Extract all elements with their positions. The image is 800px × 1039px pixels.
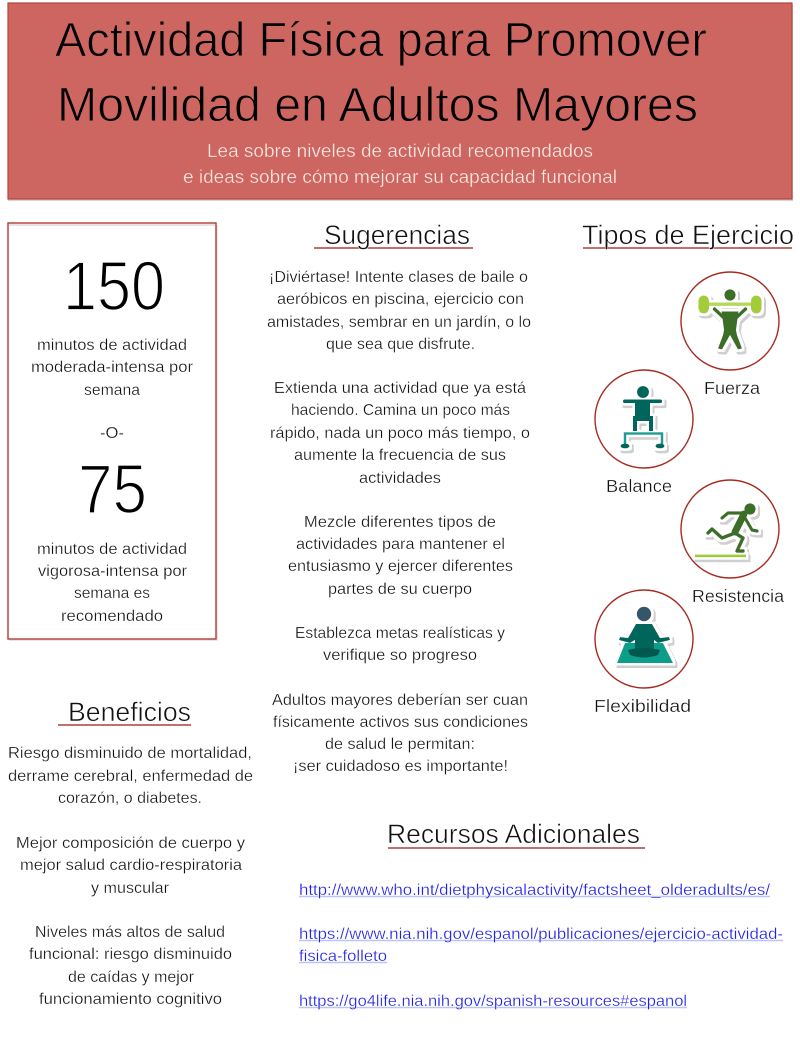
- text block: benefits: corazón, o diabetes.: [58, 790, 202, 807]
- text block: suggestions: Adultos mayores deberían ser cuan: [272, 692, 528, 709]
- heading: Sugerencias: Sugerencias: [324, 220, 470, 250]
- panel: recommended activity minutes: [8, 223, 218, 641]
- icon: Balance figure: [595, 370, 693, 468]
- text block: suggestions: ¡ser cuidadoso es importante!: [293, 758, 508, 775]
- title: Actividad Física para Promover: [55, 14, 707, 67]
- vigorous activity text: minutos de actividad: [37, 541, 187, 558]
- label: Balance: Balance: [606, 476, 672, 496]
- text block: benefits: Niveles más altos de salud: [35, 924, 225, 941]
- vigorous activity text: semana es: [74, 585, 150, 602]
- moderate activity text: minutos de actividad: [37, 337, 187, 354]
- resource links: fisica-folleto: [299, 948, 387, 965]
- number 150: 150: [63, 247, 165, 325]
- text block: suggestions: aumente la frecuencia de sus: [294, 447, 506, 464]
- separator O: -O-: [100, 425, 124, 442]
- header banner: [8, 3, 793, 201]
- text block: suggestions: amistades, sembrar en un jardín, o lo: [267, 314, 531, 331]
- vigorous activity text: recomendado: [61, 608, 163, 625]
- text block: suggestions: físicamente activos sus condiciones: [273, 714, 528, 731]
- title: Movilidad en Adultos Mayores: [57, 79, 698, 132]
- vigorous activity text: [37, 541, 188, 625]
- resource links: [299, 882, 783, 1010]
- text block: benefits: y muscular: [91, 880, 170, 897]
- text block: suggestions: verifique so progreso: [323, 647, 477, 664]
- heading: Recursos Adicionales: Recursos Adicionales: [387, 819, 640, 849]
- icon: Fuerza weightlifter: [681, 272, 779, 370]
- text block: suggestions: partes de su cuerpo: [328, 581, 472, 598]
- text block: suggestions: actividades: [359, 470, 441, 487]
- text block: benefits: funcionamiento cognitivo: [39, 991, 222, 1008]
- subtitle: e ideas sobre cómo mejorar su capacidad funcional: [183, 166, 617, 187]
- label: Fuerza: Fuerza: [704, 378, 760, 398]
- text block: suggestions: haciendo. Camina un poco más: [291, 402, 510, 419]
- heading: Beneficios: Beneficios: [68, 697, 191, 727]
- text block: suggestions: actividades para mantener el: [296, 536, 505, 553]
- resource links: https://www.nia.nih.gov/espanol/publicaciones/ejercicio-actividad-: [299, 926, 783, 943]
- text block: benefits: Mejor composición de cuerpo y: [16, 835, 245, 852]
- heading: Tipos de Ejercicio: Tipos de Ejercicio: [582, 220, 794, 250]
- label: Resistencia: Resistencia: [692, 586, 784, 606]
- text block: benefits: [8, 745, 253, 1008]
- text block: suggestions: aeróbicos en piscina, ejercicio con: [277, 291, 524, 308]
- resource links: https://go4life.nia.nih.gov/spanish-resources#espanol: [299, 993, 687, 1010]
- text block: suggestions: rápido, nada un poco más tiempo, o: [270, 425, 530, 442]
- text block: suggestions: Mezcle diferentes tipos de: [304, 514, 496, 531]
- text block: suggestions: Extienda una actividad que ya está: [274, 380, 526, 397]
- text block: suggestions: [267, 269, 531, 775]
- subtitle: Lea sobre niveles de actividad recomendados: [207, 140, 593, 161]
- moderate activity text: [31, 337, 194, 399]
- title: [55, 14, 707, 132]
- text block: benefits: Riesgo disminuido de mortalidad,: [8, 745, 252, 762]
- text block: benefits: derrame cerebral, enfermedad de: [8, 768, 253, 785]
- moderate activity text: semana: [84, 382, 140, 399]
- text block: suggestions: ¡Diviértase! Intente clases de baile o: [269, 269, 528, 286]
- resource links: http://www.who.int/dietphysicalactivity/factsheet_olderadults/es/: [299, 882, 771, 899]
- text block: suggestions: Establezca metas realísticas y: [295, 625, 505, 642]
- text block: suggestions: entusiasmo y ejercer diferentes: [288, 558, 513, 575]
- text block: benefits: mejor salud cardio-respiratoria: [20, 857, 242, 874]
- text block: suggestions: de salud le permitan:: [325, 736, 475, 753]
- text block: benefits: de caídas y mejor: [68, 969, 195, 986]
- number 75: 75: [78, 450, 147, 528]
- icon: Resistencia runner: [681, 480, 779, 578]
- label: Flexibilidad: Flexibilidad: [594, 696, 691, 716]
- vigorous activity text: vigorosa-intensa por: [38, 563, 188, 580]
- icon: Flexibilidad meditating figure: [595, 590, 693, 688]
- subtitle: [183, 140, 617, 187]
- moderate activity text: moderada-intensa por: [31, 359, 194, 376]
- text block: suggestions: que sea que disfrute.: [326, 336, 475, 353]
- text block: benefits: funcional: riesgo disminuido: [29, 946, 232, 963]
